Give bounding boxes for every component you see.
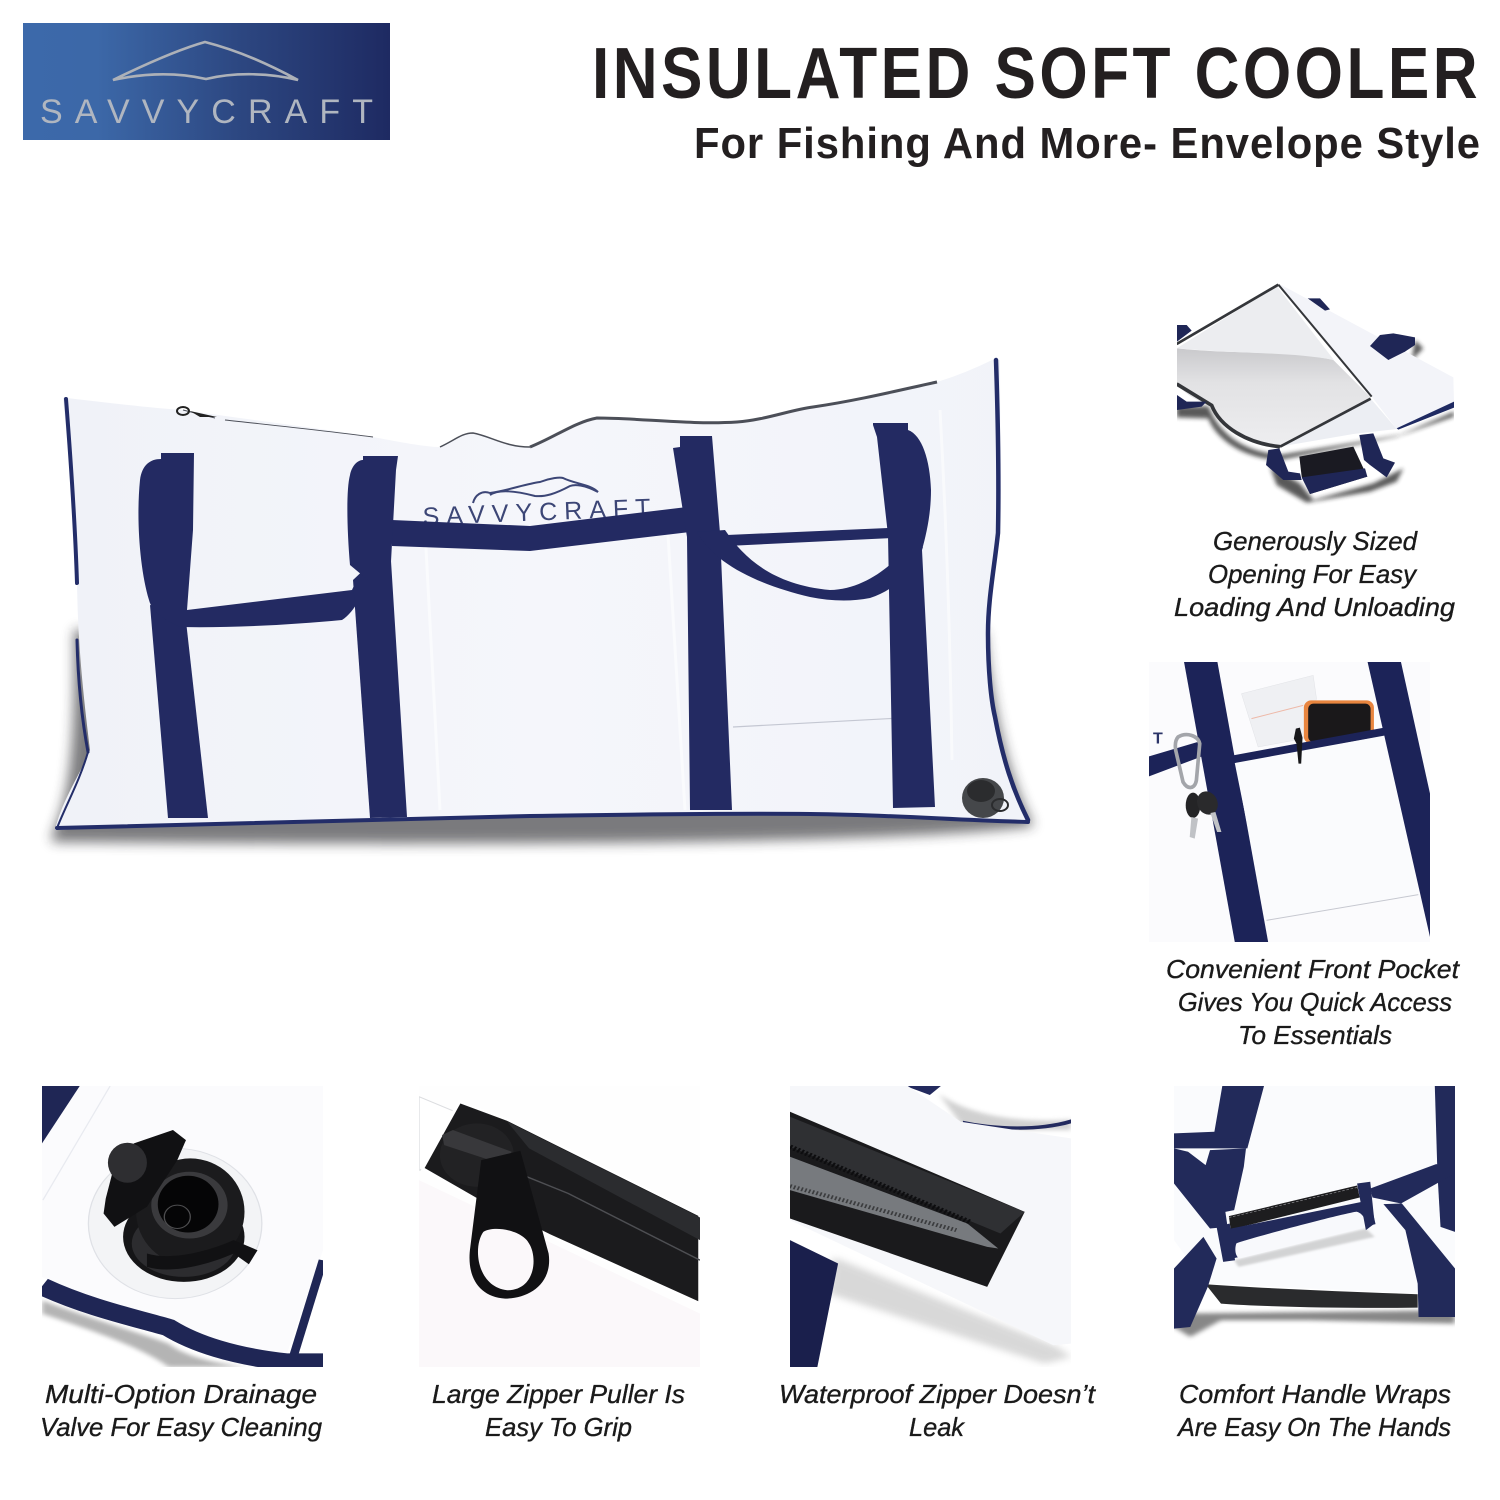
caption: front pocket [1166,954,1461,1050]
caption: opening: Opening For Easy [1208,559,1418,589]
teeth [790,1147,970,1222]
band [1149,740,1205,776]
caption: comfort handle wraps [1176,1379,1451,1442]
zipper edges [1177,285,1372,447]
strap 4 [873,423,935,808]
caption: zipper puller: Easy To Grip [485,1412,632,1442]
keys [1186,788,1222,839]
phone [1304,700,1374,744]
strap 1 [138,453,368,818]
front flap [1280,399,1397,447]
panel [1174,1086,1455,1310]
handle wrap [1217,1182,1376,1267]
pen [1294,728,1303,764]
caption: opening: Generously Sized [1213,526,1419,556]
carabiner [1175,735,1200,787]
photo: front pocket [1149,662,1430,942]
bottom binding [42,1286,323,1362]
left strap [1184,662,1268,942]
straps [1174,1086,1455,1329]
navy handles [1177,298,1415,480]
drain valve [962,778,1008,818]
body [790,1086,1071,1345]
subtitle: For Fishing And More- Envelope Style [694,119,1481,168]
caption: waterproof zipper: Leak [909,1412,966,1442]
bag logo: SAVVYCRAFT [422,494,651,531]
tape [790,1112,1025,1287]
caption: zipper puller: Large Zipper Puller Is [432,1379,685,1409]
slider disc [440,1123,514,1187]
right panel [1278,283,1454,429]
caption: opening [1174,526,1456,622]
strap 2 [347,456,407,818]
inner lower lining [1177,348,1371,447]
valve [104,1130,258,1282]
caption: waterproof zipper [779,1379,1097,1442]
caption: opening: Loading And Unloading [1174,592,1456,622]
logo: Savvycraft [23,23,390,140]
zipper seam [183,382,937,447]
caption: waterproof zipper: Waterproof Zipper Doesn’t [779,1379,1097,1409]
main product photo: white soft cooler bag [52,360,1034,844]
zipper pull [177,407,217,417]
caption: comfort handle wraps: Are Easy On The Hands [1176,1412,1451,1442]
pocket [1235,735,1418,920]
photo: generously sized opening [1177,284,1454,506]
photo: comfort handle wraps [1174,1086,1455,1340]
central band [392,507,690,551]
caption: drainage valve: Valve For Easy Cleaning [40,1412,323,1442]
caption: front pocket: To Essentials [1238,1020,1392,1050]
caption: comfort handle wraps: Comfort Handle Wraps [1179,1379,1451,1409]
caption: drainage valve: Multi-Option Drainage [45,1379,317,1409]
panel body [42,1086,323,1357]
bag body [55,360,1030,830]
paper [1241,675,1317,747]
logo letter: T [1153,731,1163,748]
navy corner [42,1086,80,1143]
puller [470,1151,549,1299]
bottom zipper [1206,1284,1418,1308]
pocket trim [1233,728,1386,763]
inner upper lining [1177,286,1334,360]
bag logo [422,478,651,531]
zipper tape [422,1102,700,1304]
caption: zipper puller [432,1379,685,1442]
bag trim [57,360,1028,828]
photo: zipper puller [419,1096,700,1302]
navy straps [906,1086,941,1095]
velcro strap [1299,447,1367,494]
right strap [1368,662,1430,937]
welded disc [88,1148,262,1299]
caption: front pocket: Gives You Quick Access [1178,987,1452,1017]
caption: drainage valve [40,1379,323,1442]
photo: waterproof zipper [790,1086,1071,1367]
caption: front pocket: Convenient Front Pocket [1166,954,1461,984]
photo: drainage valve [42,1086,323,1367]
logo: Savvycraft: SAVVYCRAFT [40,93,373,131]
pocket crease [733,718,900,727]
thin strap band [727,528,892,546]
strap 3 [673,436,923,810]
